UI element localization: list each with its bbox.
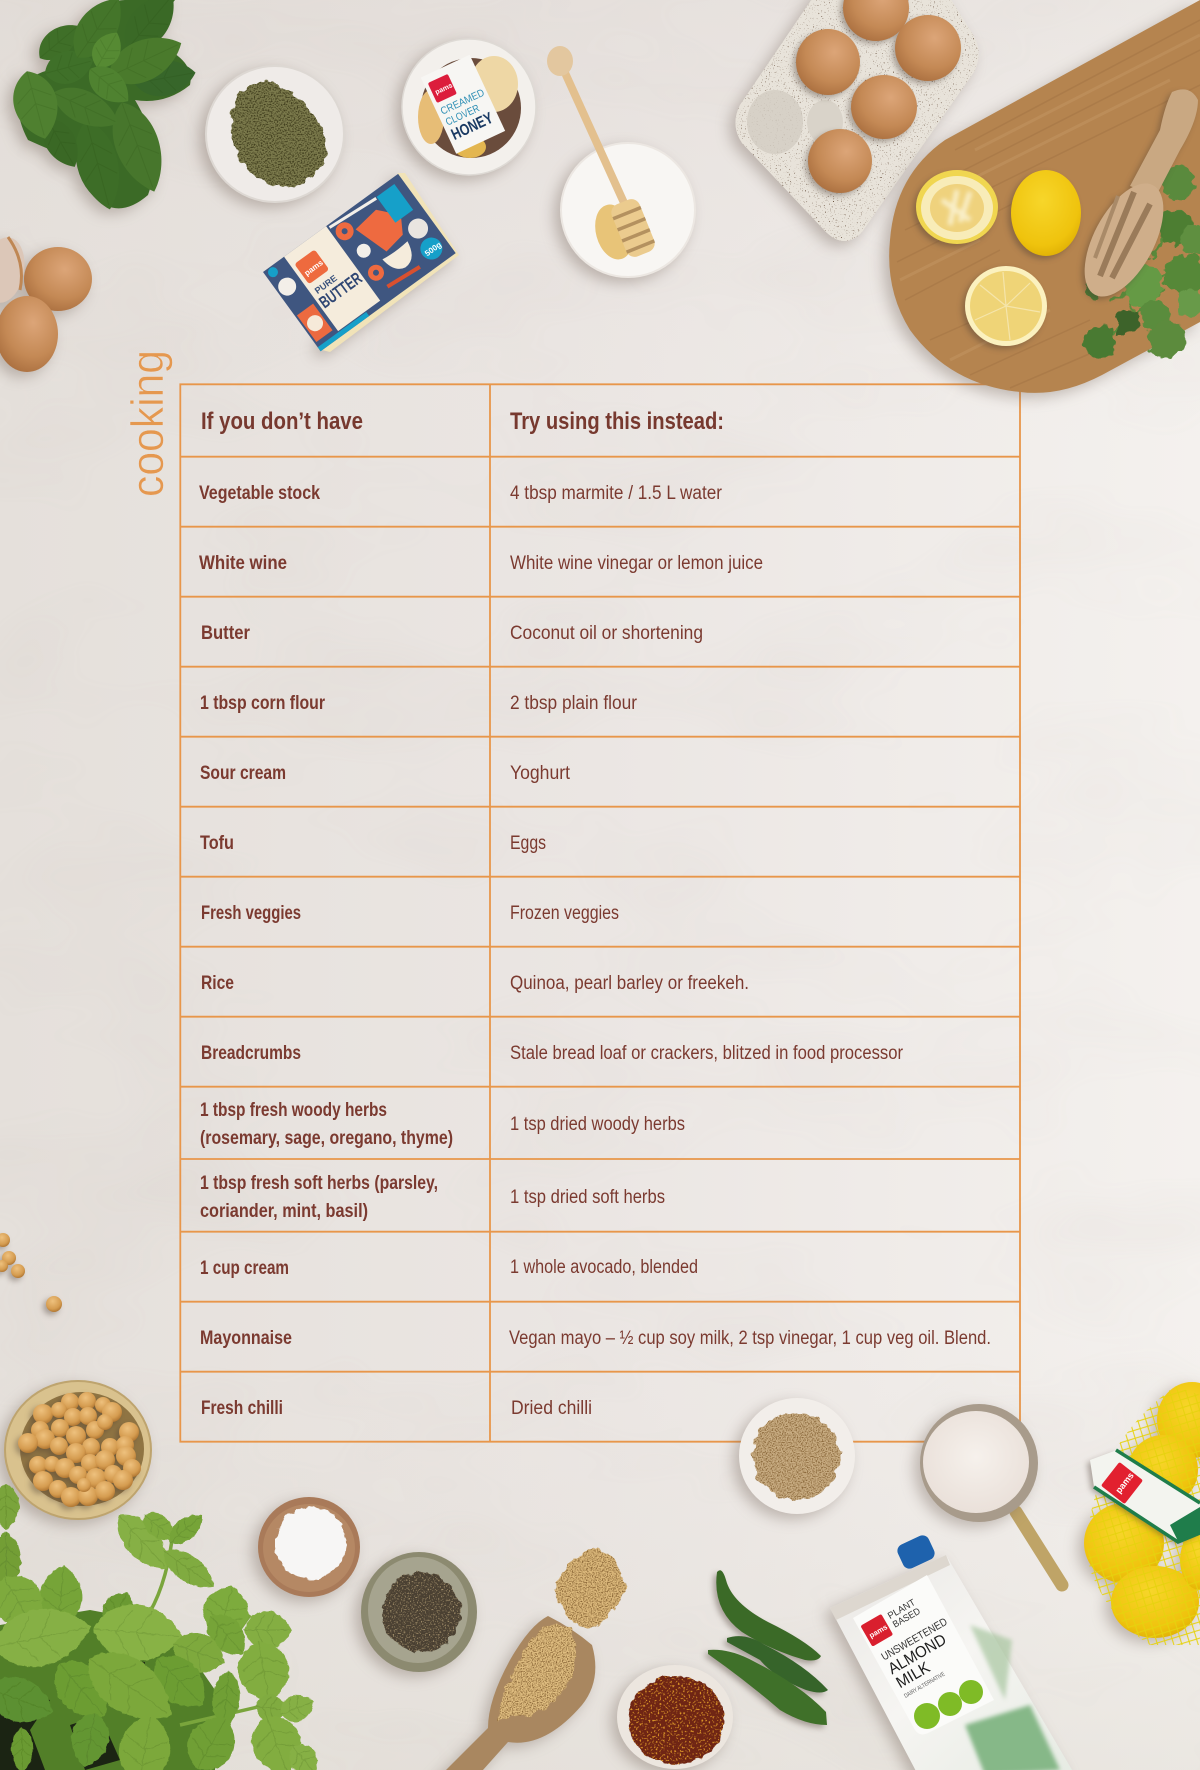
- honey label: CLOVER: [444, 102, 482, 128]
- row: rice: [201, 973, 749, 994]
- row: vegetable stock: 4 tbsp marmite / 1.5 L water: [510, 483, 723, 504]
- label text: [860, 1587, 971, 1701]
- food photo: green chillies: [708, 1570, 828, 1725]
- section label: cooking: cooking: [122, 350, 173, 497]
- ceramic tray: [735, 0, 979, 241]
- product: pure butter box: [263, 173, 459, 352]
- yellow net: [1088, 1386, 1200, 1645]
- food photo: bowl of chickpeas: [5, 1381, 151, 1519]
- row: breadcrumbs: Breadcrumbs: [201, 1043, 301, 1064]
- row: rice: Quinoa, pearl barley or freekeh.: [510, 973, 749, 994]
- row: fresh veggies: Fresh veggies: [201, 903, 301, 924]
- plate: [206, 66, 344, 202]
- row: cream: 1 cup cream: [200, 1258, 289, 1279]
- food photo: wooden chopping board with lemons, reamer and coriander: [889, 0, 1200, 393]
- row: tofu: [200, 833, 546, 854]
- row: soft herbs: 1 tsp dried soft herbs: [510, 1187, 665, 1208]
- row: fresh veggies: Frozen veggies: [510, 903, 619, 924]
- row: butter: [201, 623, 703, 644]
- row: woody herbs: (rosemary, sage, oregano, thyme): [200, 1128, 453, 1149]
- label text: UNSWEETENED: [880, 1616, 950, 1663]
- row: mayonnaise: [200, 1328, 991, 1349]
- row: butter: Coconut oil or shortening: [510, 623, 703, 644]
- pams lemon bag label: [1090, 1450, 1200, 1542]
- table header: If you don’t have: [201, 408, 363, 435]
- row: vegetable stock: Vegetable stock: [199, 483, 320, 504]
- row: woody herbs: 1 tsp dried woody herbs: [510, 1114, 685, 1135]
- food photo: bag of lemons in yellow net: [1084, 1382, 1200, 1645]
- row: soft herbs: coriander, mint, basil): [200, 1201, 368, 1222]
- row: white wine: White wine vinegar or lemon juice: [510, 553, 763, 574]
- wooden reamer: [1068, 89, 1198, 309]
- row: corn flour: 1 tbsp corn flour: [200, 693, 325, 714]
- row: corn flour: [200, 693, 638, 714]
- row: white wine: [199, 553, 763, 574]
- food photo: bowl of chilli flakes: [617, 1665, 733, 1769]
- label badges: [914, 1680, 983, 1729]
- food photo: whole eggs and shell: [0, 234, 92, 372]
- product: pure butter box: BUTTER: [316, 269, 366, 312]
- row: tofu: Tofu: [200, 833, 234, 854]
- mint leaves: [0, 1484, 326, 1770]
- row: butter: Butter: [201, 623, 251, 644]
- food photo: dish of dried oregano: [206, 66, 344, 202]
- food photo: golden sugar pile: [555, 1548, 626, 1628]
- food photo: bag of lemons in yellow net: pams: [1113, 1471, 1136, 1495]
- table header: [201, 408, 724, 435]
- row: fresh veggies: [201, 903, 619, 924]
- food photo: small pan of almond milk: [920, 1404, 1062, 1585]
- row: woody herbs: 1 tbsp fresh woody herbs: [200, 1100, 387, 1121]
- honey label: CREAMED: [439, 87, 487, 118]
- row: mayonnaise: Vegan mayo – ½ cup soy milk, 2 tsp vinegar, 1 cup veg oil. Blend.: [509, 1328, 991, 1349]
- food photo: bowl of cracked pepper: [361, 1552, 477, 1672]
- chickpeas: [18, 1392, 141, 1507]
- food photo: wooden scoop with sugar: [436, 1616, 595, 1770]
- honey label: pams: [434, 82, 454, 96]
- dried herbs: [231, 82, 328, 188]
- white dish: [561, 143, 695, 277]
- product: pure butter box: PURE: [313, 273, 339, 296]
- honey label: [421, 55, 505, 154]
- food photo: scattered chickpeas: [0, 1233, 62, 1312]
- lemons: [1084, 1382, 1200, 1638]
- row: white wine: White wine: [199, 553, 287, 574]
- table header: Try using this instead:: [510, 408, 724, 435]
- label text: pams: [868, 1622, 889, 1640]
- row: fresh chilli: Fresh chilli: [201, 1398, 283, 1419]
- front label: [853, 1575, 994, 1734]
- honey puddle: [589, 200, 639, 264]
- row: fresh chilli: Dried chilli: [511, 1398, 592, 1419]
- blue screw cap: [895, 1533, 937, 1571]
- green mass, dark soil and stems: [0, 1610, 215, 1770]
- food photo: basil bunch: [6, 0, 199, 215]
- product: pure butter box: 500g: [423, 240, 443, 258]
- dipper stick: [561, 64, 625, 205]
- product: pure butter box: pams: [303, 258, 325, 278]
- coriander: [1085, 167, 1200, 359]
- row: tofu: Eggs: [510, 833, 546, 854]
- row: corn flour: 2 tbsp plain flour: [510, 693, 638, 714]
- table grid lines: [180, 384, 1020, 1442]
- honey label: HONEY: [449, 110, 496, 144]
- row: woody herbs: [200, 1100, 685, 1149]
- product: unsweetened almond milk carton: [830, 1533, 1075, 1770]
- label text: MILK: [894, 1659, 933, 1692]
- squeezed lemon half: [916, 170, 998, 244]
- food photo: bowl of brown sugar: [739, 1398, 855, 1514]
- ceramic bowl: [5, 1381, 151, 1519]
- row: soft herbs: 1 tbsp fresh soft herbs (parsley,: [200, 1173, 438, 1194]
- row: rice: Rice: [201, 973, 234, 994]
- row: sour cream: Yoghurt: [510, 763, 571, 784]
- dipper head: [609, 196, 657, 260]
- food photo: bowl of sea salt: [258, 1497, 360, 1597]
- label text: ALMOND: [886, 1631, 949, 1678]
- row: fresh chilli: [201, 1398, 592, 1419]
- label text: PLANT: [886, 1597, 918, 1622]
- label text: DAIRY ALTERNATIVE: [904, 1672, 946, 1700]
- butter box face: [263, 174, 456, 351]
- row: vegetable stock: [199, 483, 723, 504]
- row: breadcrumbs: Stale bread loaf or crackers, blitzed in food processor: [510, 1043, 904, 1064]
- product: honey dipper on white dish: [547, 46, 695, 277]
- row: cream: 1 whole avocado, blended: [510, 1257, 698, 1278]
- eggs in tray: [796, 0, 961, 193]
- row: mayonnaise: Mayonnaise: [200, 1328, 292, 1349]
- substitution table: [180, 384, 1020, 1442]
- product: creamed clover honey tub: [402, 39, 536, 175]
- pan: [920, 1404, 1038, 1522]
- smoothie picture: [970, 1625, 1012, 1700]
- row: sour cream: [200, 763, 571, 784]
- row: cream: [200, 1257, 698, 1279]
- chopping board: [889, 0, 1200, 393]
- cut lemon half: [965, 266, 1047, 346]
- food photo: basil-like mint plant: [0, 1484, 326, 1770]
- label text: BASED: [891, 1606, 923, 1630]
- row: soft herbs: [200, 1173, 665, 1222]
- brass handle: [1016, 1512, 1062, 1585]
- row: breadcrumbs: [201, 1043, 904, 1064]
- carton body: [830, 1555, 1075, 1770]
- product photo: speckled egg tray with eggs: [735, 0, 979, 241]
- row: sour cream: Sour cream: [200, 763, 286, 784]
- whole lemon: [1011, 170, 1081, 256]
